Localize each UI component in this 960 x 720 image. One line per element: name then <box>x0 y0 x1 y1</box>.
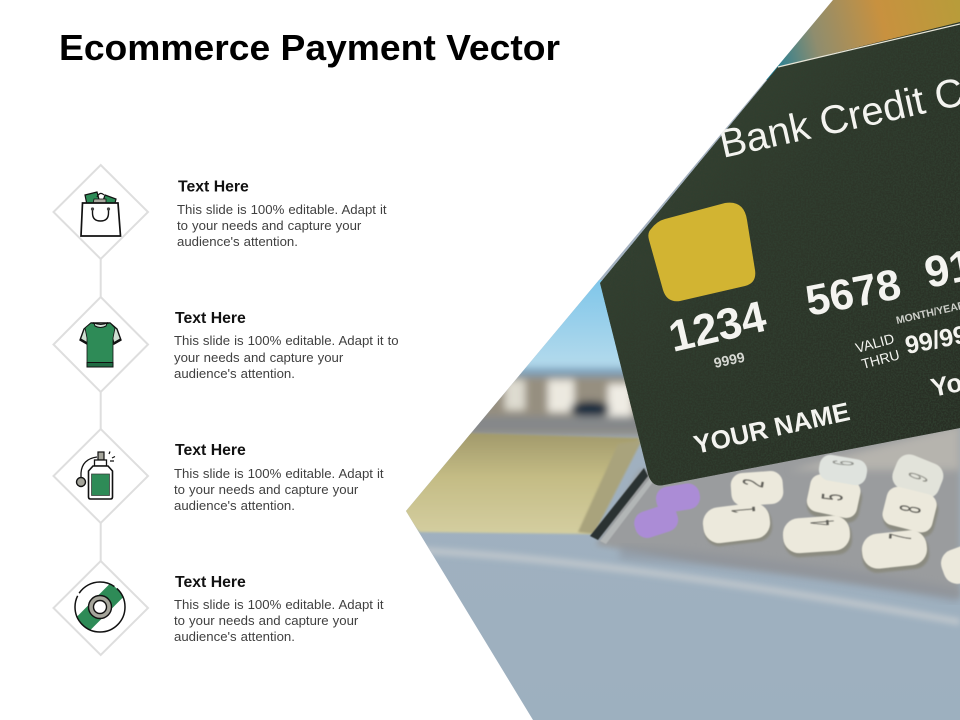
heading: Text Here <box>175 442 246 459</box>
text block: audience's attention. <box>177 234 298 249</box>
key digits: 7 <box>884 533 919 541</box>
card text: 1234 <box>664 292 771 362</box>
item 4: compact disc <box>54 561 384 655</box>
icon: t-shirt <box>54 297 148 392</box>
key digits: 8 <box>893 503 927 515</box>
key digits: 9 <box>903 469 934 485</box>
text block: This slide is 100% editable. Adapt it <box>174 597 384 612</box>
key digits: 6 <box>826 459 860 467</box>
key digits <box>725 459 934 541</box>
connector lines <box>100 259 102 561</box>
chip <box>648 203 755 301</box>
card text: 5678 <box>802 260 905 326</box>
text block: This slide is 100% editable. Adapt it to <box>174 333 399 348</box>
card text: YOUR NAME <box>691 396 852 460</box>
key digits: 5 <box>815 492 849 502</box>
text block <box>174 333 399 381</box>
text block: This slide is 100% editable. Adapt it <box>177 202 387 217</box>
key digits: 2 <box>736 477 770 489</box>
icon: perfume bottle <box>54 429 148 523</box>
card text <box>664 70 960 460</box>
keypad keys <box>631 450 960 588</box>
title: Ecommerce Payment Vector <box>59 27 560 68</box>
card text: VALID <box>854 330 896 356</box>
text block: to your needs and capture your <box>177 218 362 233</box>
photo: credit card on payment terminal <box>400 0 960 720</box>
text block: to your needs and capture your <box>174 613 359 628</box>
item 2: t-shirt <box>54 297 399 392</box>
text block: audience's attention. <box>174 629 295 644</box>
icon: shopping bag <box>54 165 148 259</box>
key digits: 4 <box>804 518 842 527</box>
key digits: 1 <box>725 505 763 514</box>
text block: to your needs and capture your <box>174 482 359 497</box>
text block <box>174 597 384 644</box>
item 3: perfume bottle <box>54 429 384 523</box>
text block <box>177 202 387 249</box>
heading: Text Here <box>175 574 246 591</box>
text block: audience's attention. <box>174 366 295 381</box>
item 1: shopping bag <box>54 165 387 259</box>
heading: Text Here <box>175 310 246 327</box>
text block: your needs and capture your <box>174 350 344 365</box>
photo background <box>400 0 960 720</box>
text block <box>174 466 384 513</box>
card body <box>600 22 960 486</box>
credit card <box>590 15 960 495</box>
card text: 9999 <box>712 349 746 371</box>
card text: THRU <box>860 346 901 372</box>
text block: audience's attention. <box>174 498 295 513</box>
heading: Text Here <box>178 178 249 196</box>
icon: compact disc <box>54 561 148 655</box>
text block: This slide is 100% editable. Adapt it <box>174 466 384 481</box>
